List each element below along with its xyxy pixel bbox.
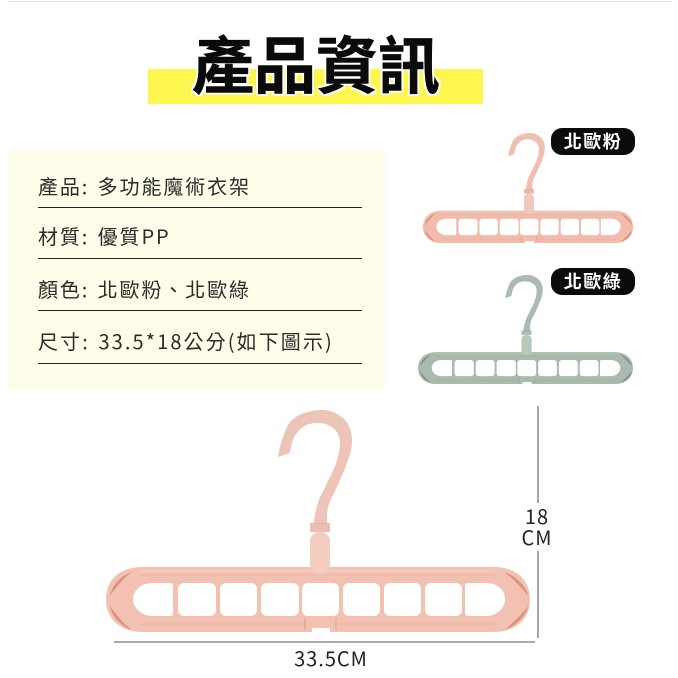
spec: size — [38, 328, 362, 364]
width dimension line — [114, 641, 535, 643]
label: green colour — [551, 268, 635, 295]
icon: small green hanger — [418, 275, 633, 385]
height label: 18 — [525, 501, 549, 530]
spec: product name — [38, 173, 362, 208]
title highlight bar — [148, 69, 483, 104]
label: green colour: 北歐綠 — [564, 268, 622, 294]
spec: colours: 顏色: 北歐粉、北歐綠 — [38, 274, 251, 303]
spec: size: 尺寸: 33.5*18公分(如下圖示) — [38, 326, 334, 355]
title heading: 產品資訊 — [192, 16, 440, 106]
spec: material: 材質: 優質PP — [38, 221, 171, 250]
icon: large pink hanger — [106, 410, 530, 633]
spec: product name: 產品: 多功能魔術衣架 — [38, 171, 251, 200]
width label: 33.5CM — [294, 643, 368, 672]
height label: CM — [522, 522, 552, 551]
height label — [522, 501, 552, 551]
title banner — [148, 16, 483, 106]
panel: product specifications — [8, 150, 385, 390]
spec: material — [38, 223, 362, 259]
height dimension line — [537, 406, 539, 638]
label: pink colour: 北歐粉 — [564, 128, 622, 154]
spec: colours — [38, 276, 362, 311]
label: pink colour — [551, 128, 635, 155]
icon: small pink hanger — [423, 133, 633, 244]
